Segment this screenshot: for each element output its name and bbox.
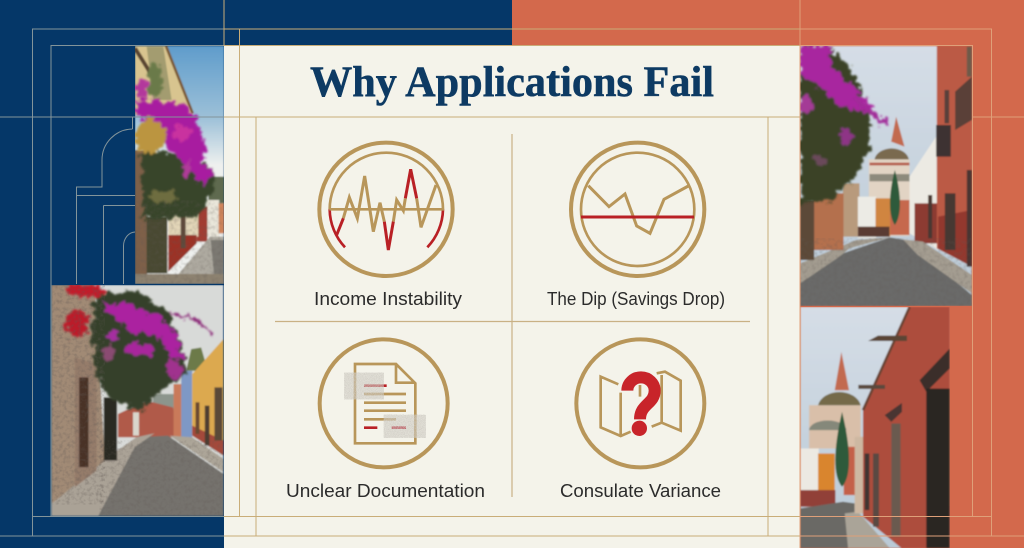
icon: savings drop chart [571, 143, 704, 276]
foliage [800, 46, 888, 205]
label: Unclear Documentation [286, 481, 485, 501]
label: Consulate Variance [560, 481, 721, 501]
icon: blurred document [320, 339, 448, 467]
texture [135, 200, 224, 284]
label: Income Instability [314, 289, 462, 309]
panel: income instability [314, 143, 462, 309]
texture: road [100, 441, 223, 516]
foliage [66, 284, 213, 411]
icon: volatile income chart [319, 143, 453, 276]
title: Why Applications Fail [310, 59, 714, 106]
dividers [275, 134, 750, 497]
label: The Dip (Savings Drop) [547, 289, 725, 309]
panel: consulate variance [560, 339, 721, 501]
foliage [134, 62, 217, 220]
texture: road [800, 238, 972, 306]
photo: church street, upper right [800, 46, 972, 306]
photo: bougainvillea street, upper left [135, 46, 224, 284]
panel: the dip [547, 143, 725, 309]
texture: stone wall [52, 285, 105, 504]
panel: unclear documentation [286, 339, 485, 501]
photo: red wall street, lower right [800, 307, 950, 548]
photo: stone wall street with flowers, lower left [52, 285, 224, 516]
icon: map with question mark [576, 339, 704, 467]
